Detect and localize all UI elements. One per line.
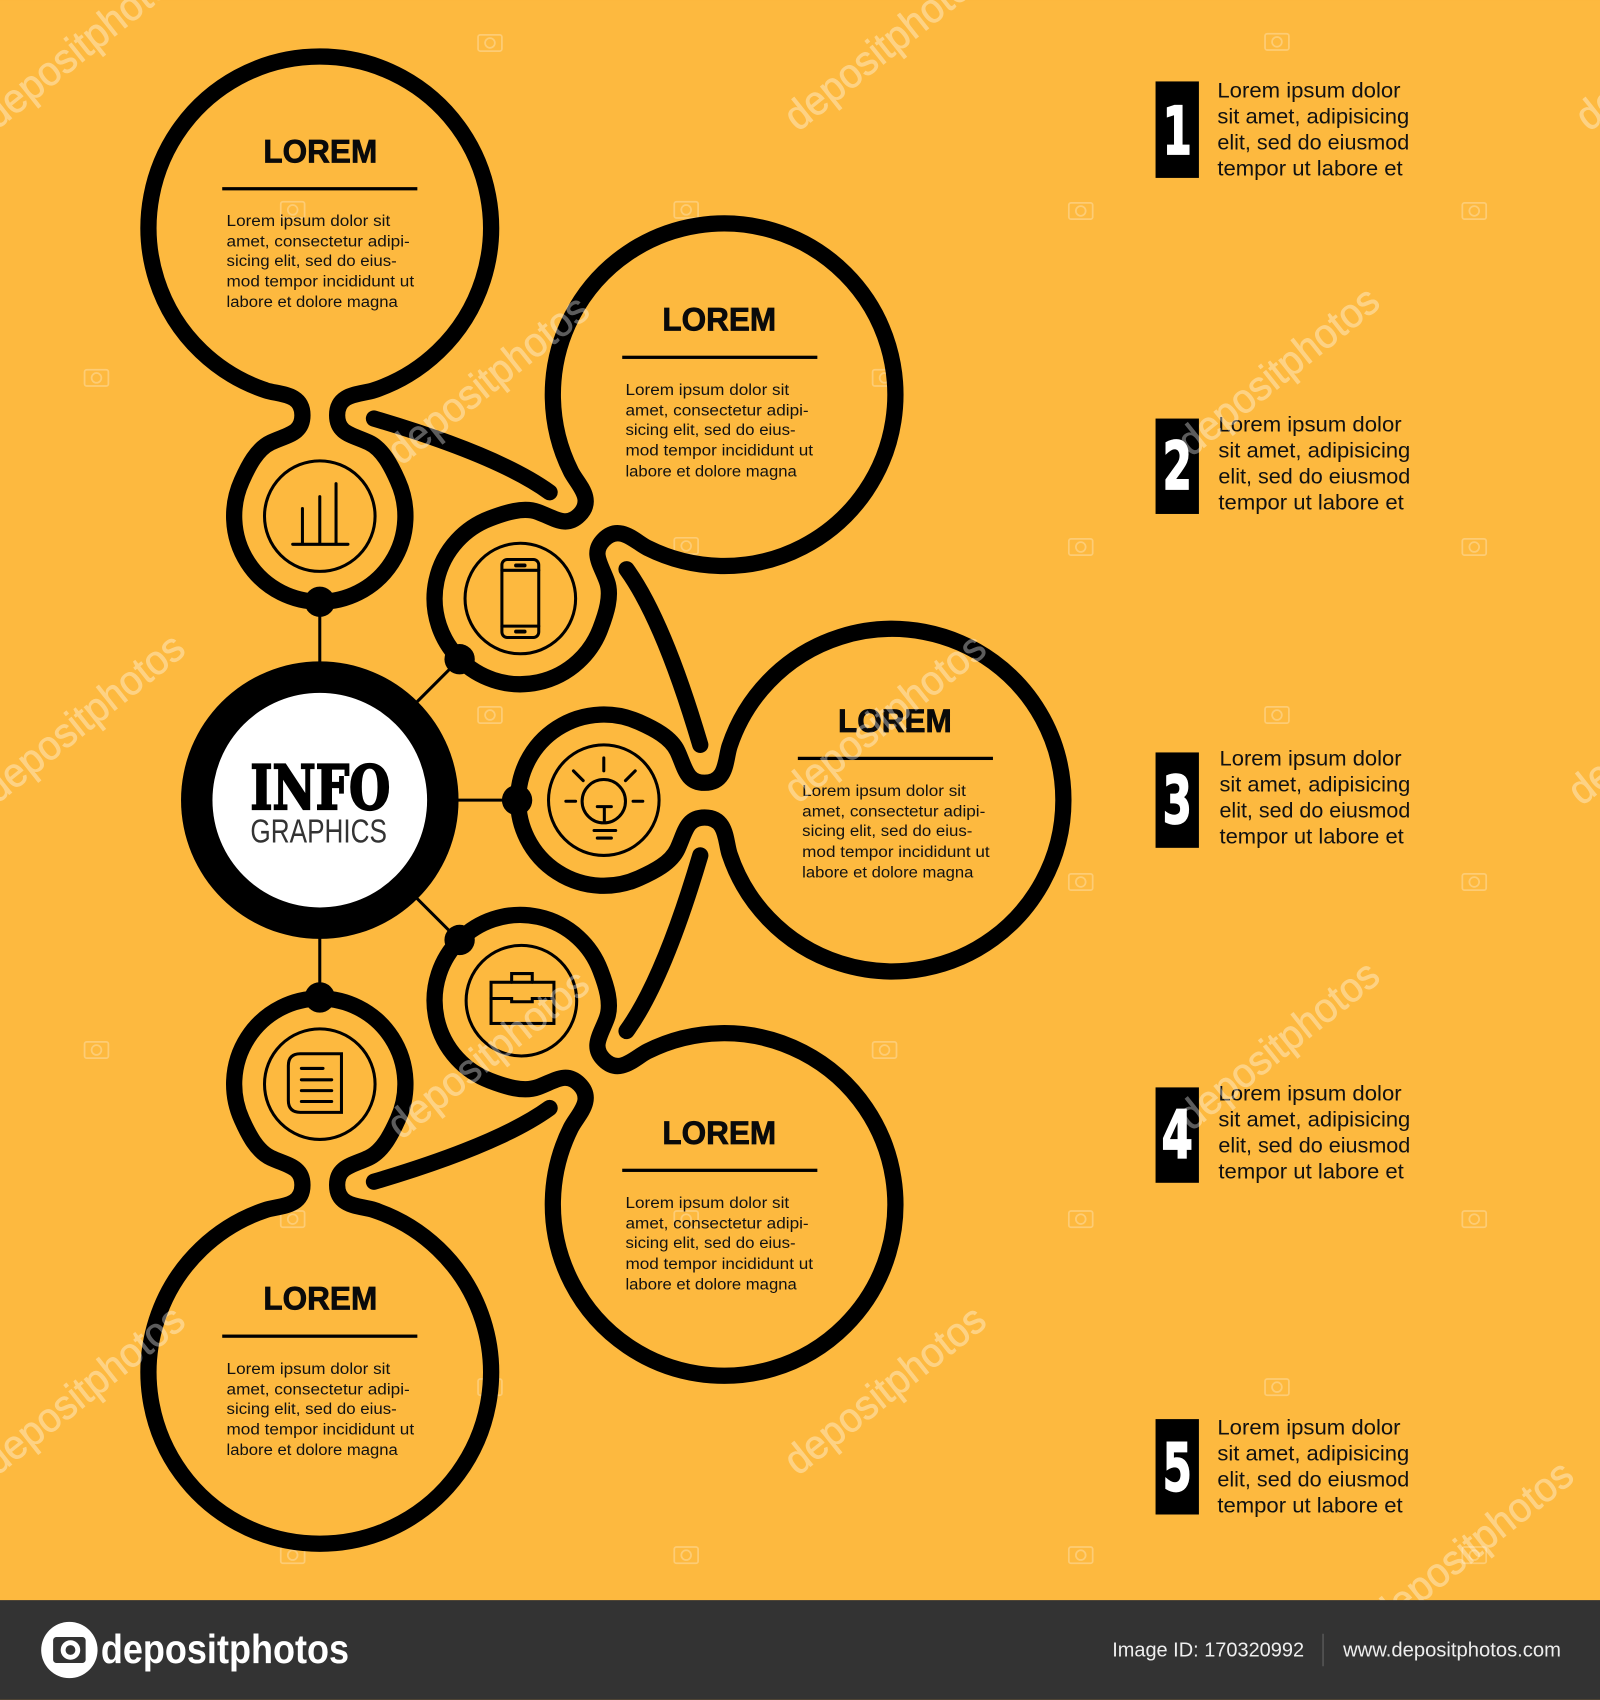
legend item 4: tempor ut labore et	[1218, 1160, 1404, 1183]
text block 4: Lorem ipsum dolor sit	[625, 1195, 790, 1212]
text block 2: sicing elit, sed do eius-	[625, 422, 796, 439]
icon: briefcase	[466, 945, 577, 1056]
rule 4	[622, 1169, 817, 1172]
node dot 3	[502, 785, 532, 815]
text block 3: amet, consectetur adipi-	[802, 804, 985, 821]
node dot 2	[444, 644, 475, 674]
outline: bubble 2	[339, 153, 966, 780]
text block 5: sicing elit, sed do eius-	[227, 1401, 397, 1418]
node dot 4	[444, 925, 475, 955]
rule 2	[622, 356, 817, 359]
panel 5: document bubble	[149, 982, 491, 1544]
node dot 5	[305, 982, 335, 1013]
text block 3: mod tempor incididunt ut	[802, 844, 990, 861]
watermarks: depositphotos	[1168, 951, 1388, 1139]
legend item 1: Lorem ipsum dolor	[1217, 80, 1401, 103]
panel 1: chart bubble	[149, 57, 491, 617]
legend item 2	[1156, 414, 1410, 515]
heading: lorem 1: LOREM	[263, 134, 377, 170]
watermarks: depositphotos	[775, 1296, 994, 1484]
legend item 3: Lorem ipsum dolor	[1220, 747, 1402, 770]
logo icon	[41, 1622, 98, 1678]
legend item 4: sit amet, adipisicing	[1218, 1108, 1410, 1131]
text block 3	[802, 783, 990, 881]
node dot 1	[305, 587, 335, 617]
legend item 5: Lorem ipsum dolor	[1217, 1416, 1401, 1439]
watermarks: depositphotos	[1362, 1451, 1582, 1639]
watermarks: depositphotos	[378, 960, 598, 1148]
text block 1: mod tempor incididunt ut	[227, 274, 415, 291]
heading: lorem 4: LOREM	[662, 1115, 776, 1151]
text block 1: sicing elit, sed do eius-	[227, 253, 397, 270]
legend item 3: sit amet, adipisicing	[1220, 773, 1410, 796]
text block 2: labore et dolore magna	[625, 463, 797, 480]
curved arrows between bubbles	[374, 419, 700, 1182]
text block 3: sicing elit, sed do eius-	[802, 823, 972, 840]
website: www.depositphotos.com	[1342, 1639, 1561, 1662]
text block 5	[227, 1361, 415, 1459]
legend item 4: Lorem ipsum dolor	[1218, 1082, 1402, 1105]
text block 2: Lorem ipsum dolor sit	[625, 382, 790, 399]
legend item 1: tempor ut labore et	[1217, 158, 1403, 181]
legend item 4: elit, sed do eiusmod	[1218, 1134, 1410, 1157]
watermarks: depositphotos	[1168, 277, 1388, 465]
legend item 5	[1156, 1416, 1409, 1517]
watermarks: depositphotos	[378, 285, 598, 473]
rule 1	[222, 187, 417, 190]
text block 5: amet, consectetur adipi-	[227, 1381, 410, 1398]
legend item 2: Lorem ipsum dolor	[1218, 414, 1402, 437]
outline: bubble 1	[149, 57, 491, 602]
text block 4: sicing elit, sed do eius-	[625, 1235, 796, 1252]
logo text: depositphotos	[101, 1626, 349, 1672]
text block 1: amet, consectetur adipi-	[227, 234, 410, 251]
text block 5: Lorem ipsum dolor sit	[227, 1361, 391, 1378]
text block 4: amet, consectetur adipi-	[625, 1216, 809, 1233]
legend item 1: 1	[1163, 93, 1192, 170]
legend item 5: 5	[1163, 1430, 1192, 1507]
outline: bubble 3	[518, 629, 1063, 971]
panel 3: idea bubble	[502, 629, 1063, 971]
legend item 4: 4	[1162, 1097, 1193, 1174]
text block 5: labore et dolore magna	[227, 1442, 398, 1459]
image id: Image ID: 170320992	[1112, 1639, 1304, 1662]
hub: info graphics	[181, 661, 459, 939]
text block 1: Lorem ipsum dolor sit	[227, 213, 391, 230]
legend item 1: sit amet, adipisicing	[1217, 106, 1409, 129]
icon: document	[264, 1029, 375, 1139]
legend item 5: sit amet, adipisicing	[1217, 1442, 1409, 1465]
legend item 2: elit, sed do eiusmod	[1218, 466, 1410, 489]
icon: smartphone	[465, 543, 576, 654]
icon: bar chart	[264, 461, 375, 571]
legend item 2: tempor ut labore et	[1218, 492, 1404, 515]
watermarks: depositphotos	[775, 624, 994, 812]
text block 2: amet, consectetur adipi-	[625, 403, 809, 420]
text block 1: labore et dolore magna	[227, 294, 398, 311]
legend item 2: sit amet, adipisicing	[1218, 440, 1410, 463]
hub: info graphics: INFO	[250, 753, 390, 824]
legend item 3: tempor ut labore et	[1220, 825, 1404, 848]
footer bar	[0, 1600, 1600, 1700]
rule 5	[222, 1335, 417, 1338]
text block 4: labore et dolore magna	[625, 1276, 797, 1293]
heading: lorem 2: LOREM	[662, 302, 776, 338]
rule 3	[798, 757, 993, 760]
legend item 4	[1156, 1082, 1410, 1183]
icon: light bulb	[549, 745, 659, 855]
panel 2: phone bubble	[339, 153, 966, 780]
text block 2: mod tempor incididunt ut	[625, 443, 814, 460]
panel 4: briefcase bubble	[339, 819, 966, 1447]
hub: info graphics: GRAPHICS	[250, 813, 387, 850]
outline: bubble 5	[149, 998, 491, 1544]
legend item 1	[1156, 80, 1409, 181]
text block 3: labore et dolore magna	[802, 864, 974, 881]
text block 4	[625, 1195, 814, 1293]
legend item 5: tempor ut labore et	[1217, 1494, 1403, 1517]
heading: lorem 5: LOREM	[263, 1281, 377, 1317]
legend item 1: elit, sed do eiusmod	[1217, 132, 1409, 155]
text block 3: Lorem ipsum dolor sit	[802, 783, 967, 800]
connector lines from hub	[320, 613, 517, 997]
legend item 3	[1156, 747, 1410, 848]
text block 4: mod tempor incididunt ut	[625, 1256, 814, 1273]
legend item 2: 2	[1163, 428, 1192, 505]
text block 5: mod tempor incididunt ut	[227, 1422, 415, 1439]
legend item 5: elit, sed do eiusmod	[1217, 1468, 1409, 1491]
heading: lorem 3: LOREM	[838, 703, 952, 739]
legend item 3: 3	[1163, 762, 1192, 839]
text block 2	[625, 382, 814, 480]
text block 1	[227, 213, 415, 311]
legend item 3: elit, sed do eiusmod	[1220, 799, 1410, 822]
outline: bubble 4	[339, 819, 966, 1447]
